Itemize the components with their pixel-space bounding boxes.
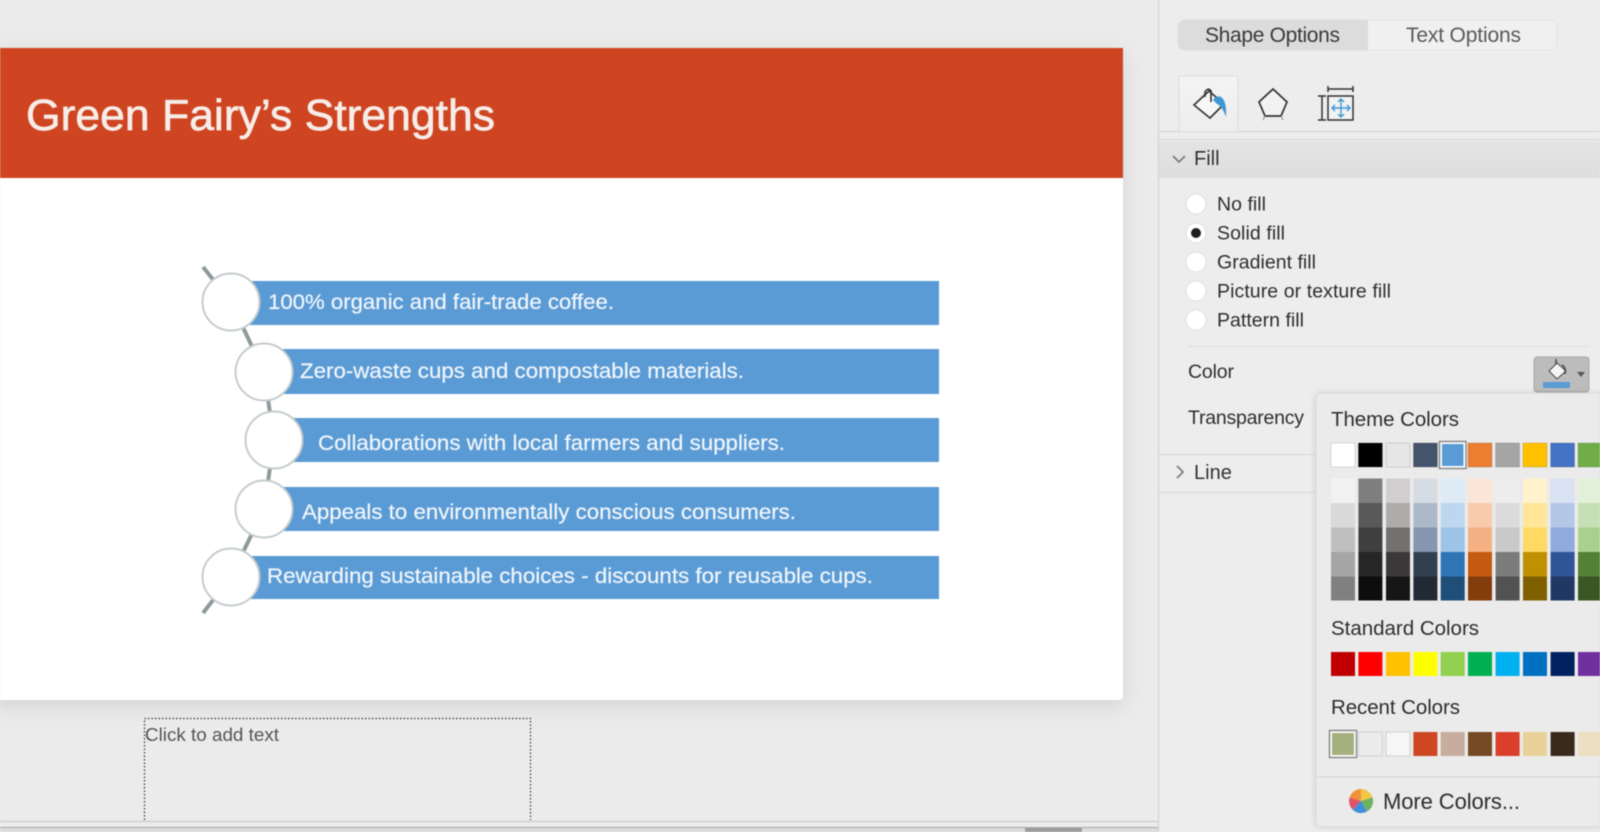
strength 2 (236, 344, 939, 400)
strength 1 (202, 274, 939, 330)
title: Green Fairy’s Strengths (26, 91, 495, 140)
section header: fill: Fill (1194, 148, 1220, 170)
theme color swatches (1331, 442, 1600, 468)
tab switch: shape and text options (1178, 20, 1557, 50)
icon: pentagon (1259, 89, 1287, 120)
fill type radio options: Picture or texture fill (1217, 280, 1391, 302)
theme color shades (1331, 478, 1600, 600)
panel: color picker popup (1316, 393, 1600, 827)
tab switch: shape and text options: Shape Options (1205, 24, 1340, 47)
strength 5: Rewarding sustainable choices - discounts for reusable cups. (267, 564, 873, 588)
slide header banner (0, 48, 1123, 178)
icon: fill bucket (1194, 89, 1226, 118)
panel: format sidebar (1158, 0, 1600, 832)
icon tabs (1159, 76, 1600, 132)
color row (1188, 357, 1589, 392)
tab switch: shape and text options: Text Options (1406, 24, 1521, 47)
icon: size and position (1318, 86, 1353, 120)
fill type radio options: Solid fill (1217, 222, 1285, 244)
section header: line: Line (1194, 462, 1232, 484)
notes placeholder (144, 718, 530, 820)
diagram: strengths list (202, 267, 939, 613)
heading: recent colors: Recent Colors (1331, 696, 1460, 719)
strength 1: 100% organic and fair-trade coffee. (268, 290, 614, 314)
strength 2: Zero-waste cups and compostable materials. (300, 359, 744, 383)
heading: theme colors: Theme Colors (1331, 408, 1459, 431)
notes placeholder: Click to add text (145, 725, 279, 745)
standard color swatches (1331, 652, 1600, 676)
fill type radio options (1186, 194, 1391, 332)
strength 3: Collaborations with local farmers and suppliers. (318, 431, 785, 455)
strength 4 (236, 480, 939, 538)
fill type radio options: Pattern fill (1217, 310, 1304, 332)
connector line (203, 267, 274, 613)
section header: line (1159, 454, 1319, 493)
strength 5 (202, 548, 939, 606)
transparency label: Transparency (1188, 407, 1304, 429)
status bar strip (0, 821, 1600, 832)
fill type radio options: No fill (1217, 194, 1266, 216)
icon: color wheel (1349, 789, 1373, 813)
section header: fill (1159, 139, 1600, 178)
strength 4: Appeals to environmentally conscious consumers. (302, 500, 796, 524)
fill type radio options: Gradient fill (1217, 252, 1316, 274)
recent color swatches (1330, 730, 1600, 758)
panel: slide (0, 48, 1123, 700)
color row: Color (1188, 361, 1234, 383)
heading: standard colors: Standard Colors (1331, 617, 1479, 640)
color picker button (1534, 357, 1589, 392)
strength 3 (246, 412, 939, 468)
more colors action: More Colors... (1383, 789, 1520, 814)
